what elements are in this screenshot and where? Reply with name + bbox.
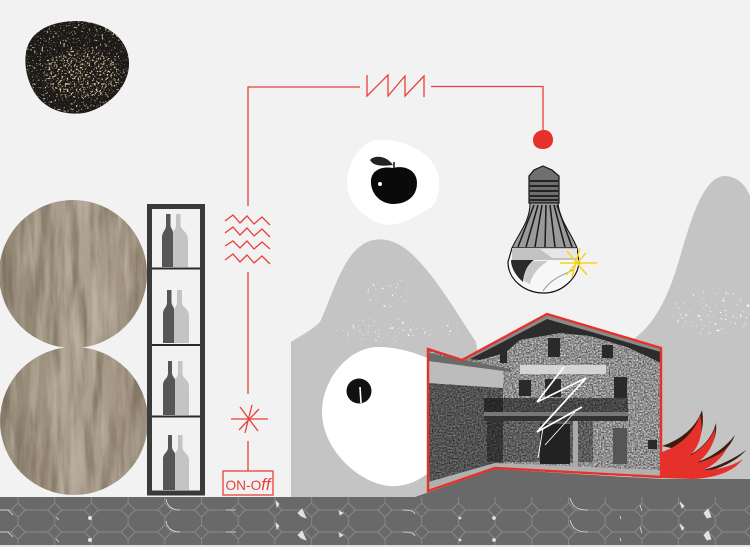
flame dark edges — [662, 410, 746, 472]
grey mountains — [291, 176, 750, 500]
white blob: lower eye — [322, 347, 432, 486]
resistor: zigzag — [225, 215, 270, 264]
bulb glass — [508, 248, 579, 293]
resistor: top — [367, 75, 424, 97]
bottles row 1 — [162, 214, 188, 267]
house photo — [427, 313, 663, 495]
switch box — [223, 471, 273, 495]
bulb body — [512, 203, 577, 248]
photo: roof edge — [464, 314, 661, 360]
photo: left plaster wall — [428, 361, 503, 388]
bulb shadow — [511, 260, 534, 282]
photo: balcony slab — [484, 412, 628, 416]
wood circle: bottom — [0, 347, 148, 495]
house red outline — [428, 314, 661, 491]
bottles row 4 — [163, 435, 189, 490]
bulb ribs — [518, 205, 572, 247]
wire: left lower — [247, 272, 249, 394]
ground band — [0, 469, 750, 545]
wire: to switch — [247, 441, 249, 471]
photo: door — [613, 428, 627, 464]
photo: porch dark centre — [540, 424, 570, 464]
white blob: apple background — [347, 140, 439, 225]
wood circle: top — [0, 200, 147, 348]
photo: column — [573, 421, 578, 471]
shelf frame — [150, 206, 202, 493]
mountain scratches — [335, 276, 750, 342]
bulb screw base — [529, 166, 559, 203]
switch label: ON-Off — [226, 475, 273, 494]
photo: left roof — [428, 353, 511, 372]
white lightning bolt — [537, 367, 586, 458]
bottles row 3 — [163, 361, 189, 415]
bulb band — [512, 248, 577, 260]
photo: left stone wall shade — [428, 383, 503, 484]
bottles row 2 — [163, 290, 189, 343]
photo: windows — [500, 338, 657, 449]
red flame — [662, 410, 746, 479]
red dot — [533, 130, 553, 149]
photo: ground — [429, 463, 660, 490]
icon: apple — [370, 157, 417, 204]
mountain: left — [291, 239, 500, 500]
bulb threads — [530, 181, 558, 200]
photo: awning — [520, 365, 606, 374]
wire: top right — [431, 86, 543, 132]
hexagon fence pattern — [0, 497, 750, 545]
flame red body — [662, 415, 743, 479]
photo: stone texture — [429, 319, 660, 482]
icon: light bulb — [508, 166, 597, 293]
shelf dividers — [152, 268, 200, 416]
bottom strip — [0, 545, 750, 547]
yellow spark — [560, 248, 597, 277]
mountain: right — [632, 176, 750, 482]
wire: top and left — [248, 87, 360, 206]
spark symbol — [231, 405, 268, 433]
red circuit — [223, 75, 543, 495]
photo: dark eaves — [468, 319, 661, 363]
dark speckled blob — [25, 21, 129, 114]
fence chips row 2 — [0, 520, 711, 542]
icon: small dark pupil — [346, 378, 372, 404]
bottle shelf — [150, 206, 202, 493]
photo: porch — [487, 420, 593, 462]
photo: balcony plants — [484, 398, 628, 412]
fence chips row 1 — [0, 498, 711, 520]
